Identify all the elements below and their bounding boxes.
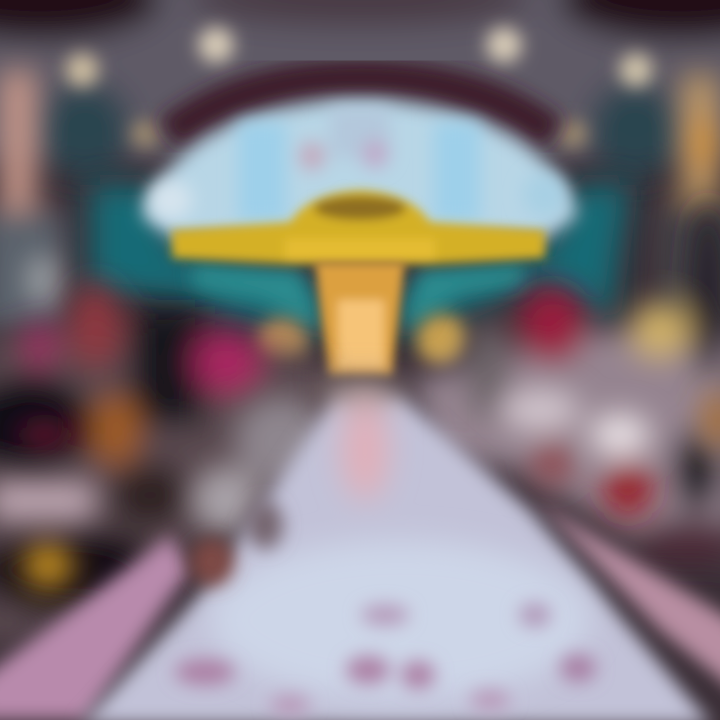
left crowd details xyxy=(0,396,326,589)
ceiling xyxy=(0,0,720,178)
floor glow xyxy=(210,378,590,700)
right crowd xyxy=(410,200,720,562)
window panes xyxy=(148,108,567,222)
right crowd details xyxy=(430,388,720,516)
seated figures near aisle xyxy=(190,501,283,586)
golden canopy xyxy=(172,190,545,264)
bright window xyxy=(142,100,578,240)
ceiling lights xyxy=(65,27,653,148)
teal lower arches xyxy=(190,265,525,330)
right pink carpet xyxy=(535,500,720,695)
floor motifs xyxy=(175,603,596,715)
dark arch xyxy=(170,78,552,135)
left crowd xyxy=(0,283,320,650)
orange column xyxy=(315,262,405,375)
teal walls xyxy=(90,185,630,340)
side doorways xyxy=(256,314,468,366)
side pillars xyxy=(0,70,720,330)
floor aisle xyxy=(80,395,712,720)
left pink carpet xyxy=(0,535,190,720)
